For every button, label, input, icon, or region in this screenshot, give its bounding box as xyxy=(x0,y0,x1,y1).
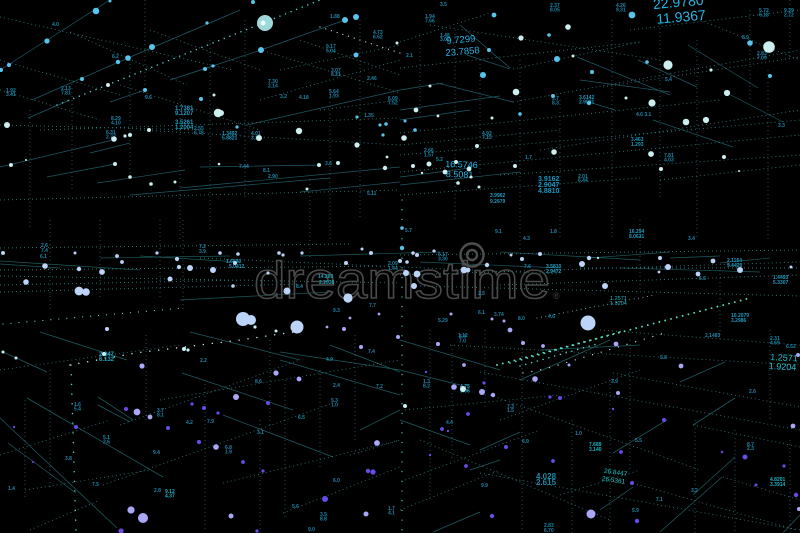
tiny data labels: 9.31 xyxy=(616,8,626,14)
number pair lower right xyxy=(769,352,798,372)
tiny data labels: 2.66 xyxy=(424,148,434,154)
tiny data labels: 5.9 xyxy=(632,508,639,514)
tiny data labels: 2.77 xyxy=(106,134,116,140)
tiny data labels: 5.29 xyxy=(438,318,448,324)
tiny data labels: 2.09 xyxy=(388,261,398,267)
number pair lower centre: 26.5361 xyxy=(601,476,626,486)
tiny data labels: 5.3 xyxy=(331,398,338,404)
tiny data labels: 7.52 xyxy=(388,100,398,106)
tiny data labels: 4.75 xyxy=(460,384,470,390)
tiny data labels: 3.5810 xyxy=(546,264,561,270)
tiny data labels: 5.7 xyxy=(405,228,412,234)
tiny data labels: 1.3 xyxy=(423,379,430,385)
tiny data labels: 1.92 xyxy=(6,88,16,94)
tiny data labels: 2.615 xyxy=(536,478,557,487)
tiny data labels: 4.73 xyxy=(373,30,383,36)
number pair mid right: 1.2571 xyxy=(610,296,627,302)
tiny data labels: 9.39 xyxy=(784,8,794,14)
tiny data labels: 2.6 xyxy=(103,440,110,446)
number pair mid right: 1.9204 xyxy=(610,301,627,307)
tiny data labels: 8.1 xyxy=(157,412,164,418)
tiny data labels: 8.7 xyxy=(747,442,754,448)
tiny data labels: 4.92 xyxy=(482,131,492,137)
tiny data labels: 7.2 xyxy=(199,244,206,250)
watermark swirl logo xyxy=(460,244,484,266)
tiny data labels: 7.4 xyxy=(368,349,375,355)
tiny data labels: 6.62 xyxy=(373,34,383,40)
tiny data labels: 2.3 xyxy=(747,446,754,452)
tiny data labels: 2.72 xyxy=(784,12,794,18)
tiny data labels: 3.02 xyxy=(440,37,450,43)
tiny data labels: 6.1 xyxy=(40,254,47,260)
tiny data labels: 3.2 xyxy=(691,488,698,494)
tiny data labels: 4.01 xyxy=(251,131,261,137)
tiny data labels: 1.8 xyxy=(550,229,557,235)
blue nodes upper area xyxy=(0,0,772,250)
tiny data labels: 2.947 xyxy=(99,352,114,358)
tiny data labels: 3.9 xyxy=(199,249,206,255)
tiny data labels: 7.2 xyxy=(376,384,383,390)
tiny data labels: 7.81 xyxy=(664,153,674,159)
tiny data labels: 7.66 xyxy=(425,18,435,24)
tiny data labels: 8.0 xyxy=(518,316,525,322)
tiny data labels: 5.64 xyxy=(329,89,339,95)
tiny data labels: 3.74 xyxy=(494,312,504,318)
tiny data labels: 7.09 xyxy=(757,56,767,62)
tiny data labels: 6.1 xyxy=(478,310,485,316)
number pair lower centre xyxy=(601,468,628,486)
tiny data labels: 2.2038 xyxy=(319,280,335,286)
tiny data labels: 6.44 xyxy=(578,178,588,184)
tiny data labels: 4.4 xyxy=(446,420,453,426)
tiny data labels: 2.6 xyxy=(749,389,756,395)
tiny data labels: 2.8 xyxy=(154,488,161,494)
tiny data labels: 4.2 xyxy=(186,420,193,426)
tiny data labels: 3.5 xyxy=(440,2,447,8)
tiny data labels: 6.8 xyxy=(225,445,232,451)
tiny data labels: 3.3 xyxy=(778,123,785,129)
tiny data labels: 7.0 xyxy=(459,338,466,344)
tiny data labels: 5.0412 xyxy=(229,264,245,270)
tiny data labels: 3.5261 xyxy=(175,120,193,126)
tiny data labels: 5.4 xyxy=(665,77,672,83)
tiny data labels: 3.5 xyxy=(320,512,327,518)
tiny data labels: 6.52 xyxy=(786,344,796,350)
tiny data labels: 9.2679 xyxy=(490,199,506,205)
tiny data labels: 1.7 xyxy=(525,155,532,161)
registered mark: ® xyxy=(553,291,560,301)
tiny data labels: 1.3492 xyxy=(222,131,237,137)
periwinkle nodes middle band xyxy=(1,248,792,334)
tiny data labels: 5.2 xyxy=(436,157,443,163)
tiny data labels: 4.8810 xyxy=(538,188,560,195)
tiny data labels: 9.0 xyxy=(308,527,315,533)
tiny data labels: 2.6 xyxy=(41,243,48,249)
tiny data labels: 5.5 xyxy=(635,438,642,444)
tiny data labels: 1.48 xyxy=(440,33,450,39)
tiny data labels: 7.30 xyxy=(268,79,278,85)
tiny data labels: 1.44 xyxy=(388,266,398,272)
tiny data labels: 3.3914 xyxy=(770,482,786,488)
tiny data labels: 4.18 xyxy=(299,95,309,101)
tiny data labels: 2.83 xyxy=(757,51,767,57)
tiny data labels: 6.18 xyxy=(759,12,769,18)
tiny data labels: 2.9031 xyxy=(579,100,595,106)
tiny data labels: 7.6 xyxy=(524,264,531,270)
number pair top right: 11.9367 xyxy=(656,7,707,27)
tiny data labels: 2.4 xyxy=(333,383,340,389)
tiny data labels: 8.9 xyxy=(742,35,749,41)
upper solid perspective lines xyxy=(0,0,783,195)
tiny data labels: 9.6 xyxy=(145,95,152,101)
tiny data labels: 8.0631 xyxy=(629,234,645,240)
tiny data labels: 2.01 xyxy=(578,174,588,180)
thick teal dotted diagonal xyxy=(497,298,750,373)
tiny data labels: 8.3 xyxy=(552,100,559,106)
tiny data labels: 2.14 xyxy=(268,84,278,90)
tiny data labels: 7.1 xyxy=(656,497,663,503)
tiny data labels: 1.12 xyxy=(458,333,468,339)
pale nodes upper area xyxy=(4,15,775,190)
tiny data labels: 1.93 xyxy=(329,94,339,100)
tiny data labels: 6.78 xyxy=(194,130,204,136)
tiny data labels: 6.17 xyxy=(438,252,448,258)
tiny data labels: 1.88 xyxy=(330,14,340,20)
tiny data labels: 2.1164 xyxy=(727,258,742,264)
tiny data labels: 1.6840 xyxy=(226,259,241,265)
tiny data labels: 9.4 xyxy=(153,450,160,456)
large glowing node xyxy=(257,15,273,31)
tiny data labels: 9.9 xyxy=(481,483,488,489)
tiny data labels: 1.0 xyxy=(575,431,582,437)
tiny data labels: 4.028 xyxy=(536,472,556,481)
tiny data labels: 4.03 xyxy=(664,158,674,164)
tiny data labels: 9.3 xyxy=(333,308,340,314)
tiny data labels: 4.1 xyxy=(388,510,395,516)
tiny data labels: 9.17 xyxy=(326,44,336,50)
number pair top centre: 23.7858 xyxy=(445,45,480,59)
tiny data labels: 2.55 xyxy=(194,126,204,132)
pale dotted diagonal lower left xyxy=(70,331,300,365)
tiny data labels: 3.4 xyxy=(688,236,695,242)
tiny data labels: 8.8 xyxy=(320,516,327,522)
tiny data labels: 5.11 xyxy=(367,191,377,197)
tiny data labels: 4.37 xyxy=(165,494,175,500)
bright pale nodes by the lower cluster xyxy=(2,325,466,408)
middle band dotted lines xyxy=(0,244,800,296)
tiny data labels: 1.35 xyxy=(364,113,374,119)
tiny data labels: 5.04 xyxy=(326,48,336,54)
number pair centre: 16.5746 xyxy=(445,159,478,170)
tiny data labels: 8.6 xyxy=(255,379,262,385)
tiny data labels: 7.44 xyxy=(239,164,249,170)
tiny data labels: 3.2 xyxy=(280,94,287,100)
tiny data labels: 5.8821 xyxy=(222,136,238,142)
tiny data labels: 3.39 xyxy=(251,136,261,142)
tiny data labels: 2.13 xyxy=(61,86,71,92)
tiny data labels: 14.283 xyxy=(318,274,333,280)
number pair top centre: 9.7299 xyxy=(446,33,476,47)
tiny data labels: 3.6 xyxy=(325,161,332,167)
tiny data labels: 7.81 xyxy=(61,90,71,96)
tiny data labels: 3.4 xyxy=(459,334,466,340)
tiny data labels: 3.41 xyxy=(6,92,16,98)
tiny data labels: 9.06 xyxy=(460,388,470,394)
tiny data labels: 4.10 xyxy=(111,120,121,126)
tiny data labels: 16.294 xyxy=(629,229,644,235)
tiny data labels: 8.05 xyxy=(550,8,560,14)
number pair mid right xyxy=(610,296,627,307)
tiny data labels: 3.9162 xyxy=(538,176,559,183)
tiny data labels: 6.5 xyxy=(298,415,305,421)
tiny data labels: 1.4493 xyxy=(773,275,788,281)
tiny data labels: 6.09 xyxy=(388,96,398,102)
tiny data labels: 5.7 xyxy=(552,96,559,102)
tiny data labels: 5.72 xyxy=(759,8,769,14)
tiny data labels: 1.9 xyxy=(225,450,232,456)
tiny data labels: 4.6 3.1 xyxy=(636,112,652,118)
bright vertical dotted columns xyxy=(71,200,402,533)
tiny data labels: 7.7 xyxy=(369,303,376,309)
tiny data labels: 1.7 xyxy=(388,506,395,512)
tiny data labels: 6.9 xyxy=(522,439,529,445)
tiny data labels: 6.6 xyxy=(699,276,706,282)
tiny data labels: 1.4 xyxy=(8,486,15,492)
tiny data labels: 3.07 xyxy=(331,68,341,74)
tiny data labels: 3.9962 xyxy=(490,193,505,199)
tiny data labels: 9.4420 xyxy=(727,263,743,269)
tiny data labels: 6.132 xyxy=(99,357,115,363)
tiny data labels: 5.3307 xyxy=(773,280,789,286)
tiny data labels: 3.8 xyxy=(65,456,72,462)
tiny data labels: 8.21 xyxy=(331,72,341,78)
tiny data labels: 9.1 xyxy=(495,229,502,235)
tiny data labels: 3.140 xyxy=(589,447,602,453)
tiny data labels: 2.31 xyxy=(770,336,780,342)
left dotted row in middle band xyxy=(3,308,183,324)
tiny data labels: 1.5 xyxy=(507,408,514,414)
tiny data labels: 4.3 xyxy=(523,236,530,242)
tiny data labels: 3.1 xyxy=(257,430,264,436)
tiny data labels: 7.689 xyxy=(589,442,602,448)
number pair lower centre: 26.8447 xyxy=(603,468,628,478)
tiny data labels: 7.5 xyxy=(92,482,99,488)
tiny data labels: 1.2004 xyxy=(175,125,194,131)
watermark: dreamstime: dreamstime xyxy=(254,252,550,310)
tiny data labels: 3.6142 xyxy=(579,95,594,101)
lilac nodes lower area xyxy=(127,312,800,523)
tiny data labels: 3.463 xyxy=(631,137,644,143)
tiny data labels: 4.0 xyxy=(52,22,59,28)
tiny data labels: 5.8 xyxy=(660,355,667,361)
tiny data labels: 2.2 xyxy=(200,358,207,364)
tiny data labels: 1.94 xyxy=(425,14,435,20)
tiny data labels: 8.29 xyxy=(111,116,121,122)
number pair centre xyxy=(445,159,478,180)
tiny data labels: 8.2 xyxy=(423,384,430,390)
tiny data labels: 6.2 xyxy=(112,54,119,60)
tiny data labels: 3.9 xyxy=(611,379,618,385)
tiny data labels: 2.37 xyxy=(550,3,560,9)
tiny data labels: 2.1 xyxy=(406,53,413,59)
tiny data labels: 7.15 xyxy=(482,135,492,141)
tiny data labels: 9.1207 xyxy=(175,111,194,117)
tiny data labels: 8.1 xyxy=(263,168,270,174)
tiny data labels: 1.7381 xyxy=(175,106,193,112)
tiny data labels: 2.90 xyxy=(268,174,278,180)
tiny data labels: 7.3 xyxy=(507,404,514,410)
tiny data labels: 2.9047 xyxy=(538,182,560,189)
tiny data labels: 2.9472 xyxy=(546,269,562,275)
number pair lower right: 1.9204 xyxy=(769,361,797,372)
tiny data labels: 10.2079 xyxy=(731,313,749,319)
tiny data labels: 4.69 xyxy=(770,340,780,346)
tiny data labels: 2.46 xyxy=(367,76,377,82)
pale dotted diagonal xyxy=(320,27,400,53)
tiny data labels: 9.12 xyxy=(165,489,175,495)
violet nodes lower area xyxy=(13,371,798,533)
tiny data labels: 1.293 xyxy=(631,142,644,148)
tiny data labels: 3.2986 xyxy=(731,318,747,324)
tiny data labels: 4.6 xyxy=(548,314,555,320)
tiny data labels: 3.30 xyxy=(438,256,448,262)
tiny data labels: 2.1483 xyxy=(705,333,721,339)
number pair lower right: 1.2571 xyxy=(770,352,798,363)
tiny data labels: 6.31 xyxy=(106,130,116,136)
tiny data labels: 7.4 xyxy=(41,248,48,254)
tiny data labels: 2.83 xyxy=(544,523,554,529)
tiny data labels: 1.0 xyxy=(331,402,338,408)
tiny data labels: 1.57 xyxy=(424,152,434,158)
tiny data labels: 5.1 xyxy=(103,435,110,441)
tiny data labels: 7.9 xyxy=(207,419,214,425)
tiny data labels: 1.6 xyxy=(74,402,81,408)
lower solid perspective lines xyxy=(0,332,800,533)
tiny data labels: 3.7 xyxy=(157,408,164,414)
tiny data labels: 2.5 xyxy=(478,291,485,297)
number pair centre: 8.5081 xyxy=(446,169,474,180)
number pair top centre xyxy=(444,33,480,59)
tiny data labels: 5.4 xyxy=(74,406,81,412)
tiny data labels: 8.4 xyxy=(296,284,303,290)
tiny data labels: 4.26 xyxy=(616,3,626,9)
large readable numbers xyxy=(444,0,798,486)
tiny data labels: 6.0 xyxy=(333,478,340,484)
upper dotted perspective lines xyxy=(0,10,800,200)
tiny data labels: 4.8201 xyxy=(770,477,785,483)
middle band lines xyxy=(0,252,770,300)
thin dotted diagonal beside large node xyxy=(537,295,655,318)
lower dotted perspective lines xyxy=(0,330,800,530)
tiny data labels: 5.6 xyxy=(292,504,299,510)
tiny data labels: 4.9 xyxy=(326,357,333,363)
bright cyan dotted diagonal xyxy=(57,0,320,105)
